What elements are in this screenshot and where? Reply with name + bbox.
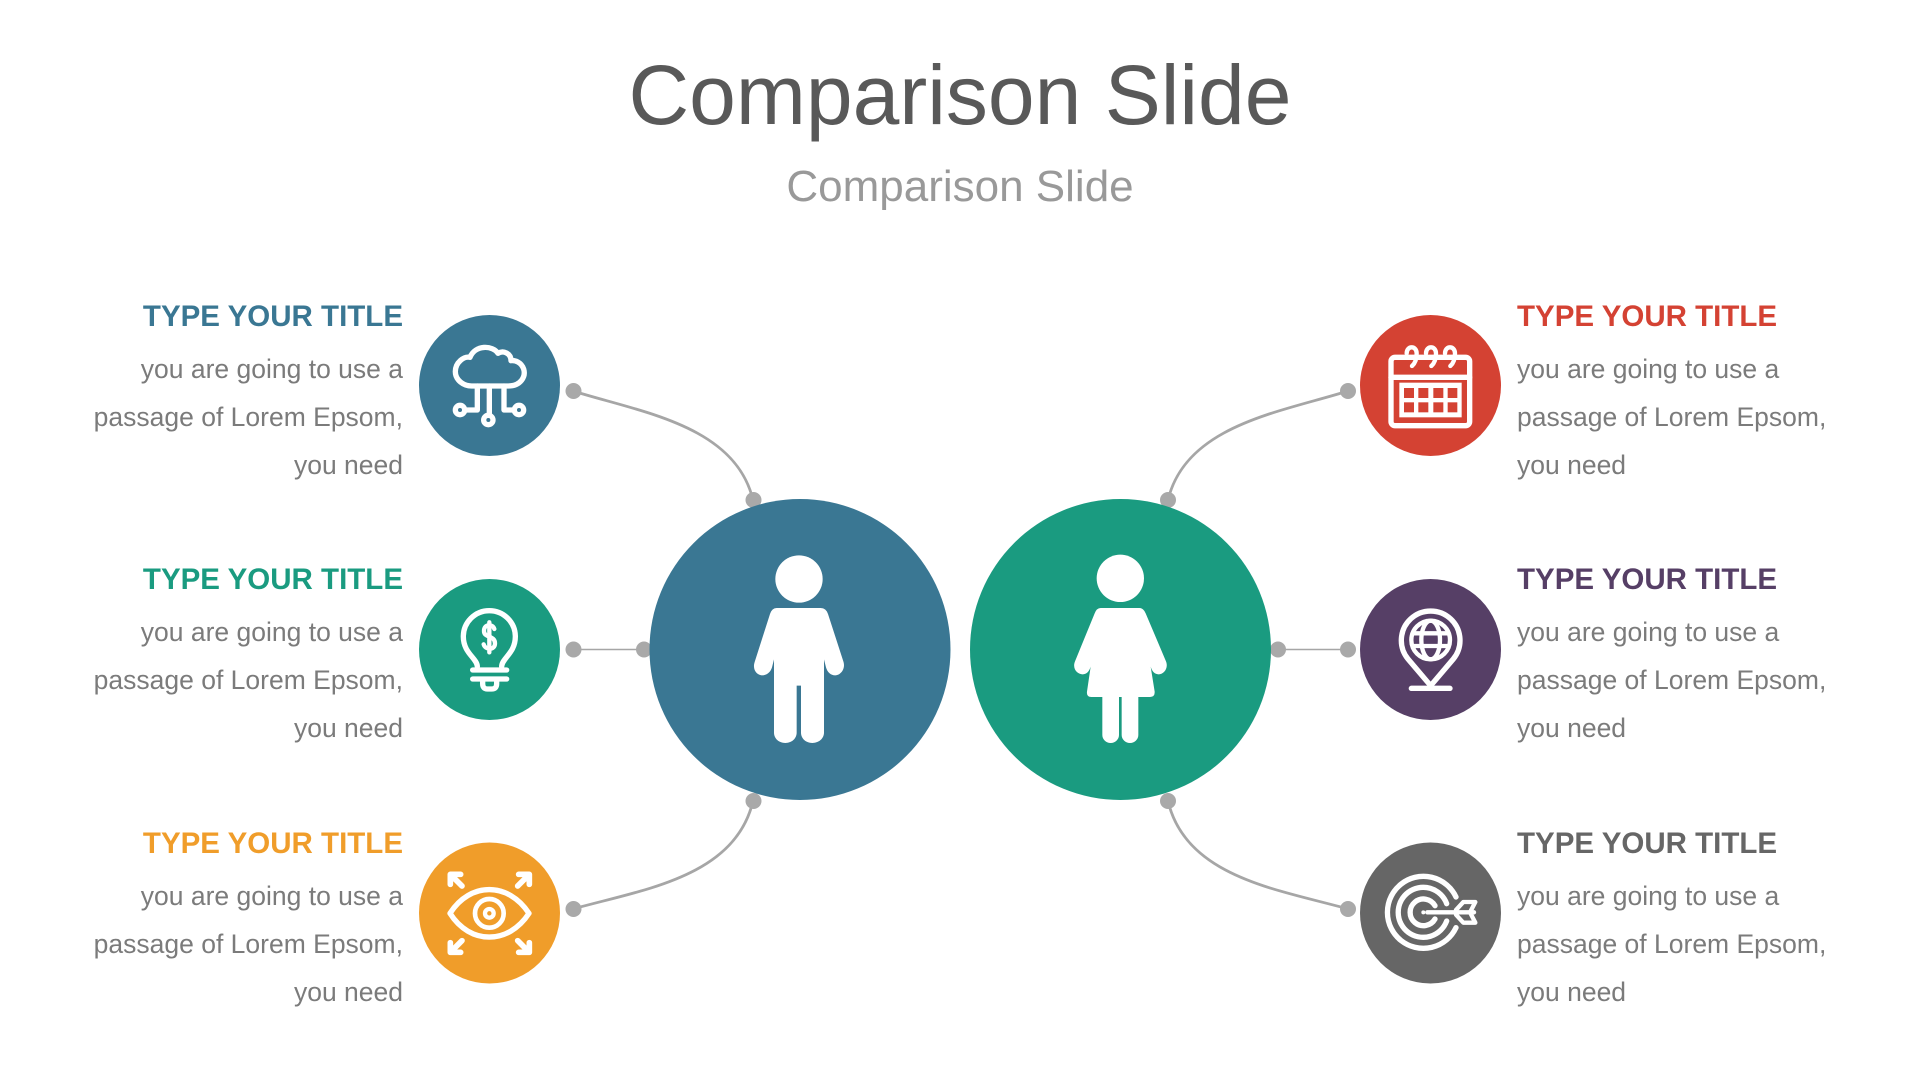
icon: target with arrow <box>1360 842 1501 984</box>
body text: passage of Lorem Epsom, <box>94 665 403 695</box>
body text: passage of Lorem Epsom, <box>1517 929 1826 959</box>
icon: dollar light bulb <box>419 579 560 720</box>
connector: top right <box>1160 383 1356 508</box>
connector: middle left <box>566 642 652 658</box>
heading: TYPE YOUR TITLE <box>143 827 403 860</box>
body text: passage of Lorem Epsom, <box>1517 665 1826 695</box>
panel: middle right <box>1517 563 1826 743</box>
panel: top left <box>94 300 403 480</box>
body text <box>94 881 403 1007</box>
title: Comparison Slide <box>629 48 1291 142</box>
central circle: female <box>970 499 1271 800</box>
body text: you are going to use a <box>141 617 403 647</box>
connector: bottom left <box>566 793 762 917</box>
body text: you need <box>294 977 403 1007</box>
panel: bottom left <box>94 827 403 1007</box>
panel: middle left <box>94 563 403 743</box>
body text: you need <box>1517 713 1626 743</box>
connector: middle right <box>1270 642 1356 658</box>
body text: you are going to use a <box>1517 354 1780 384</box>
body text: passage of Lorem Epsom, <box>94 929 403 959</box>
icon: male figure <box>754 555 844 743</box>
body text: you are going to use a <box>141 354 403 384</box>
heading: TYPE YOUR TITLE <box>1517 300 1777 333</box>
central circle: male <box>650 499 950 800</box>
heading: TYPE YOUR TITLE <box>143 300 403 333</box>
body text: you need <box>294 713 403 743</box>
heading: TYPE YOUR TITLE <box>1517 827 1777 860</box>
body text <box>1517 881 1826 1007</box>
icon: cloud network <box>419 315 560 456</box>
body text: passage of Lorem Epsom, <box>1517 402 1826 432</box>
heading: TYPE YOUR TITLE <box>1517 563 1777 596</box>
panel: top right <box>1517 300 1826 480</box>
panel: bottom right <box>1517 827 1826 1007</box>
body text: you need <box>1517 450 1626 480</box>
connector: top left <box>566 383 762 508</box>
icon: female figure <box>1074 555 1167 743</box>
icon: globe location pin <box>1360 579 1501 720</box>
subtitle: Comparison Slide <box>786 162 1134 211</box>
icon: eye with arrows <box>419 842 560 984</box>
body text: you are going to use a <box>1517 881 1780 911</box>
body text: passage of Lorem Epsom, <box>94 402 403 432</box>
body text <box>1517 617 1826 743</box>
connector: bottom right <box>1160 793 1356 917</box>
heading: TYPE YOUR TITLE <box>143 563 403 596</box>
body text <box>1517 354 1826 480</box>
body text: you need <box>1517 977 1626 1007</box>
body text: you are going to use a <box>1517 617 1780 647</box>
body text: you need <box>294 450 403 480</box>
body text <box>94 617 403 743</box>
body text: you are going to use a <box>141 881 403 911</box>
body text <box>94 354 403 480</box>
icon: calendar <box>1360 315 1501 456</box>
